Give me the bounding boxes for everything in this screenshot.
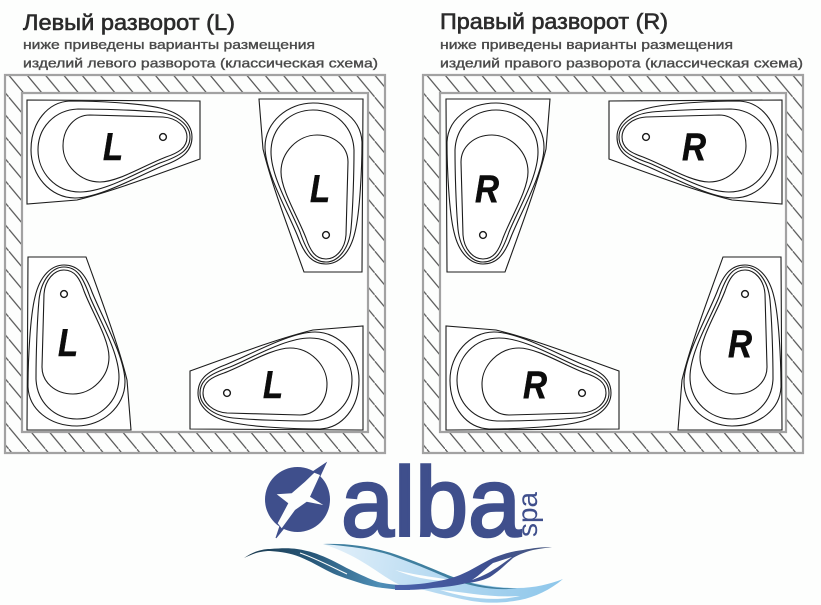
bathtub: right bottom-right	[678, 257, 782, 430]
waves	[244, 544, 563, 603]
bathtub: left top-left	[27, 100, 200, 204]
panel: right orientation	[423, 9, 803, 453]
text: left description line 2: изделий левого разворота (классическая схема)	[23, 56, 378, 70]
heading: left orientation: Левый разворот (L)	[23, 10, 235, 35]
icon: albatross emblem	[265, 463, 330, 538]
bathtub: left bottom-right	[190, 326, 363, 430]
wordmark: spa: spa	[512, 492, 543, 537]
bathtub: left top-right: L	[310, 168, 330, 211]
bathtub: left bottom-left	[27, 257, 131, 430]
room walls: left	[5, 75, 385, 453]
heading: right orientation: Правый разворот (R)	[440, 9, 668, 34]
bathtub: right bottom-right: R	[728, 323, 752, 366]
room walls: right	[423, 75, 803, 453]
bathtub: left bottom-left: L	[58, 322, 78, 365]
text: right description line 2: изделий правого разворота (классическая схема)	[440, 56, 803, 70]
bathtub: right bottom-left	[446, 326, 619, 430]
wave: highlight	[395, 570, 520, 599]
wave: teal edge	[323, 544, 517, 589]
panel: left orientation	[5, 10, 385, 453]
bathtub: left top-left: L	[103, 126, 123, 169]
bathtub: right top-left	[446, 99, 550, 272]
bathtub: left top-right	[259, 99, 363, 272]
wave: dark teal gap	[300, 553, 347, 574]
bathtub: right top-right	[609, 100, 782, 204]
bathtub: right top-left: R	[475, 168, 499, 211]
wordmark: alba: alba	[341, 447, 521, 557]
bathtub: right top-right: R	[682, 126, 706, 169]
wave: light blue	[323, 544, 563, 603]
wave: dark teal	[244, 548, 410, 590]
text: left description line 1: ниже приведены варианты размещения	[23, 37, 315, 52]
wave: navy	[395, 547, 552, 590]
logo: alba spa	[244, 447, 563, 603]
bathtub: right bottom-left: R	[523, 364, 547, 407]
wave: navy gap	[472, 557, 512, 580]
bathtub: left bottom-right: L	[263, 364, 283, 407]
text: right description line 1: ниже приведены варианты размещения	[440, 37, 733, 52]
